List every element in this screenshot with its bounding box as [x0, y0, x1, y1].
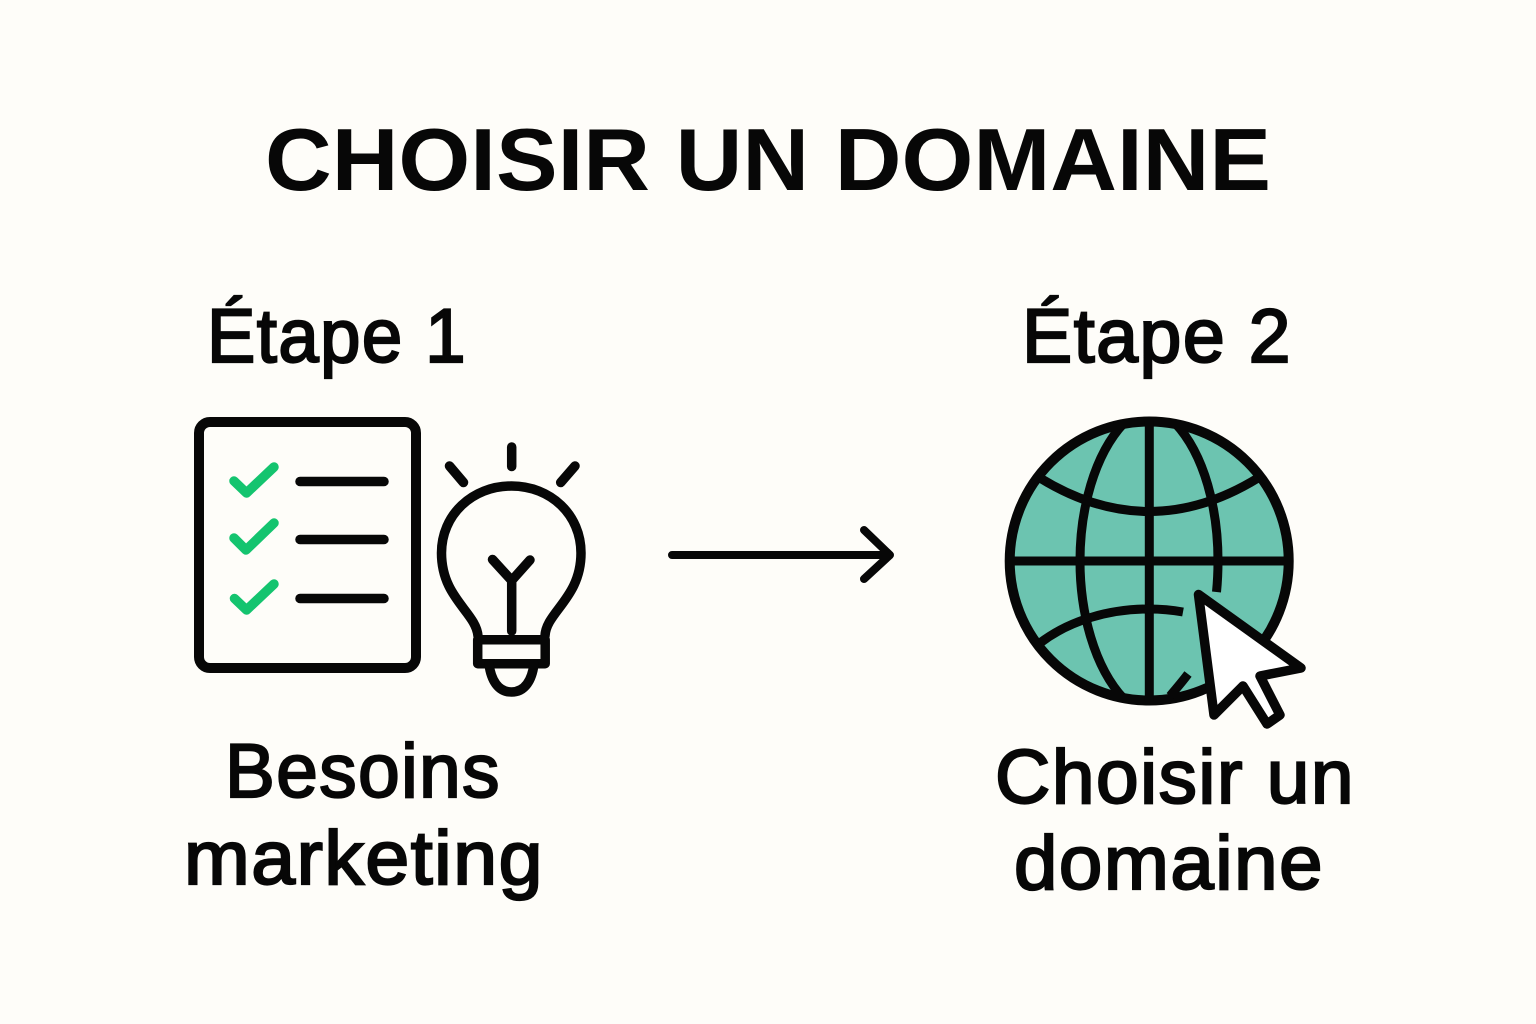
label: step 1 [184, 729, 544, 901]
label: step 2 [995, 735, 1355, 906]
arrow [672, 530, 890, 579]
green check marks [234, 467, 274, 610]
icon: globe with cursor [1010, 421, 1301, 724]
checklist lines [300, 482, 384, 598]
title: CHOISIR UN DOMAINE [265, 110, 1271, 209]
icon: light bulb [442, 447, 581, 692]
label: step 2: domaine [1014, 821, 1324, 906]
icon: checklist [199, 422, 416, 668]
label: step 1: marketing [184, 816, 544, 901]
icon: cursor [1198, 594, 1301, 724]
label: step 1: Besoins [225, 729, 501, 814]
heading: step 2: Étape 2 [1022, 294, 1292, 379]
label: step 2: Choisir un [995, 735, 1355, 820]
heading: step 1: Étape 1 [207, 294, 467, 379]
